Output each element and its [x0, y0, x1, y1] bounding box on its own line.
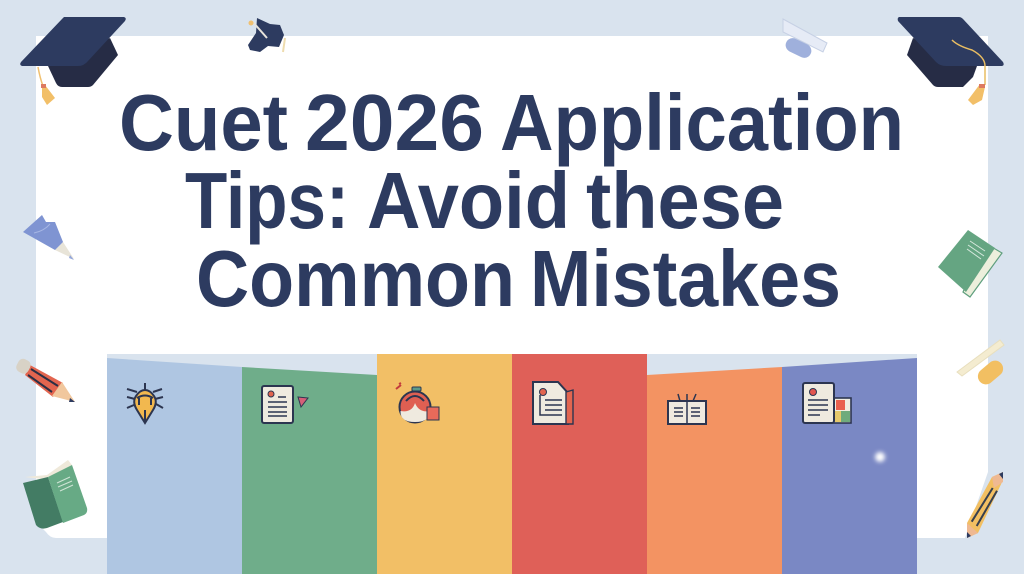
title: Avoid — [367, 156, 570, 245]
title: Mistakes — [530, 234, 841, 323]
title: Tips: — [185, 156, 349, 245]
icon: open book — [668, 394, 706, 424]
glare highlight — [875, 452, 885, 462]
icon: timer head — [396, 383, 439, 422]
icon: green book bottom left — [23, 460, 87, 529]
title: 2026 — [305, 78, 484, 167]
title: Cuet — [119, 78, 288, 167]
panel: purple column — [782, 358, 917, 574]
icon: graduation cap top right — [898, 17, 1004, 105]
icon: yellow pencil right — [967, 472, 1003, 538]
panel: red column — [512, 354, 647, 574]
panel: orange column — [647, 367, 782, 574]
panel: blue column — [107, 358, 242, 574]
icon: blue crayon left — [23, 215, 74, 260]
icon: light bulb — [127, 383, 163, 423]
title — [119, 78, 904, 323]
panel: yellow column — [377, 354, 512, 574]
panel: green column — [242, 367, 377, 574]
icon: document with colour chart — [803, 383, 851, 423]
icon: small cap top — [248, 18, 285, 52]
icon: green book right — [938, 230, 1002, 297]
panel backing band — [107, 354, 917, 384]
title: Application — [500, 78, 904, 167]
icon: graduation cap top left — [20, 17, 126, 105]
title: Common — [196, 234, 515, 323]
icon: document with folded corner — [533, 382, 573, 424]
icon: resume document — [262, 386, 308, 423]
icon: diploma and ruler top right — [783, 19, 827, 60]
title: these — [586, 156, 784, 245]
icon: ruler and eraser right — [957, 340, 1006, 388]
icon: red pencil left — [14, 357, 75, 402]
